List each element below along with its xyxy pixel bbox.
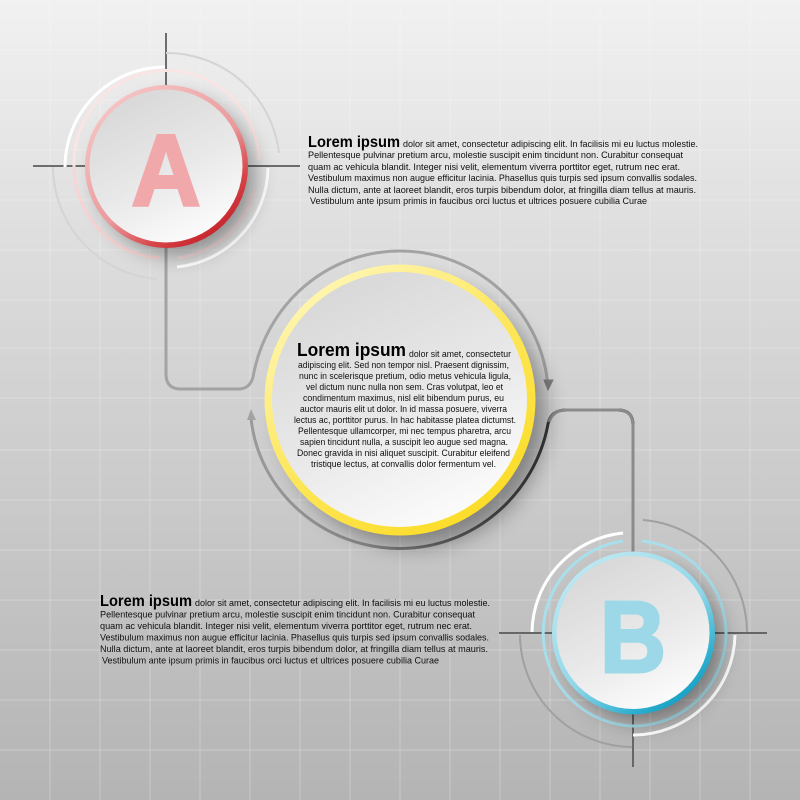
arrowhead: top arc <box>544 380 553 390</box>
connector: A to centre with arrow <box>166 248 553 390</box>
text block: A description: dolor sit amet, consectetur adipiscing elit. In facilisis mi eu luctus molestie. <box>403 138 698 149</box>
centre: disc <box>264 264 536 536</box>
text block: A description <box>308 134 698 206</box>
arrowhead: bottom arc <box>247 409 256 420</box>
text block: B description: Lorem ipsum <box>100 593 192 610</box>
node A: crosshair and rings <box>33 33 300 300</box>
text block: B description: Nulla dictum, ante at laoreet blandit, eros turpis bibendum dolor, at fringilla diam tellus at mauris. <box>100 643 488 654</box>
text block: A description: Vestibulum maximus non augue efficitur lacinia. Phasellus quis turpis sed ipsum convallis sodales. <box>308 172 697 183</box>
node B: drop shadow <box>566 566 722 722</box>
text block: centre description: Lorem ipsum <box>297 339 406 360</box>
text block: centre description: condimentum maximus, nisl elit bibendum purus, eu <box>303 392 504 403</box>
text block: A description: Lorem ipsum <box>308 134 400 151</box>
text block: B description: quam ac vehicula blandit. Integer nisi velit, elementum viverra porttitor eget, rutrum nec erat. <box>100 620 472 631</box>
text block: centre description: tristique lectus, at convallis dolor fermentum vel. <box>311 458 496 469</box>
text block: centre description: Pellentesque ullamcorper, mi nec tempus pharetra, arcu <box>298 425 511 436</box>
node B: crosshair and rings <box>499 500 767 767</box>
text block: B description <box>100 593 490 666</box>
node B: disc <box>552 552 715 714</box>
text block: B description: dolor sit amet, consectetur adipiscing elit. In facilisis mi eu luctus molestie. <box>195 597 490 608</box>
text block: centre description: auctor mauris elit ut dolor. In id massa posuere, viverra <box>300 403 508 414</box>
text block: centre description: dolor sit amet, consectetur <box>409 348 511 359</box>
text block: centre description: lectus ac, porttitor purus. In hac habitasse platea dictumst. <box>294 414 516 425</box>
text block: centre description: nunc in scelerisque pretium, odio metus vehicula ligula, <box>299 370 511 381</box>
text block: A description: Pellentesque pulvinar pretium arcu, molestie suscipit enim tincidunt non. Curabitur consequat <box>308 149 683 160</box>
text block: A description: quam ac vehicula blandit. Integer nisi velit, elementum viverra porttitor eget, rutrum nec erat. <box>308 161 680 172</box>
node A: disc <box>85 85 248 248</box>
text block: B description: Vestibulum ante ipsum primis in faucibus orci luctus et ultrices posuere cubilia Curae <box>102 654 439 666</box>
node A: drop shadow <box>99 99 255 255</box>
centre: drop shadow <box>282 282 546 546</box>
text block: A description: Nulla dictum, ante at laoreet blandit, eros turpis bibendum dolor, at fringilla diam tellus at mauris. <box>308 184 696 195</box>
text block: centre description: sapien tincidunt nulla, a suscipit leo augue sed magna. <box>300 436 508 447</box>
text block: centre description: adipiscing elit. Sed non tempor nisl. Praesent dignissim, <box>298 359 509 370</box>
text block: B description: Vestibulum maximus non augue efficitur lacinia. Phasellus quis turpis sed ipsum convallis sodales. <box>100 632 489 642</box>
text block: A description: Vestibulum ante ipsum primis in faucibus orci luctus et ultrices posuere cubilia Curae <box>310 195 647 206</box>
letter B: B <box>600 582 666 694</box>
text block: B description: Pellentesque pulvinar pretium arcu, molestie suscipit enim tincidunt non. Curabitur consequat <box>100 608 475 620</box>
text block: centre description <box>294 339 516 469</box>
letter A: A <box>132 116 200 228</box>
text block: centre description: vel dictum nunc nulla non sem. Cras volutpat, leo et <box>306 381 503 392</box>
connector: centre to B with arrow <box>247 409 633 552</box>
text block: centre description: Donec gravida in nisi aliquet suscipit. Curabitur eleifend <box>297 447 510 458</box>
